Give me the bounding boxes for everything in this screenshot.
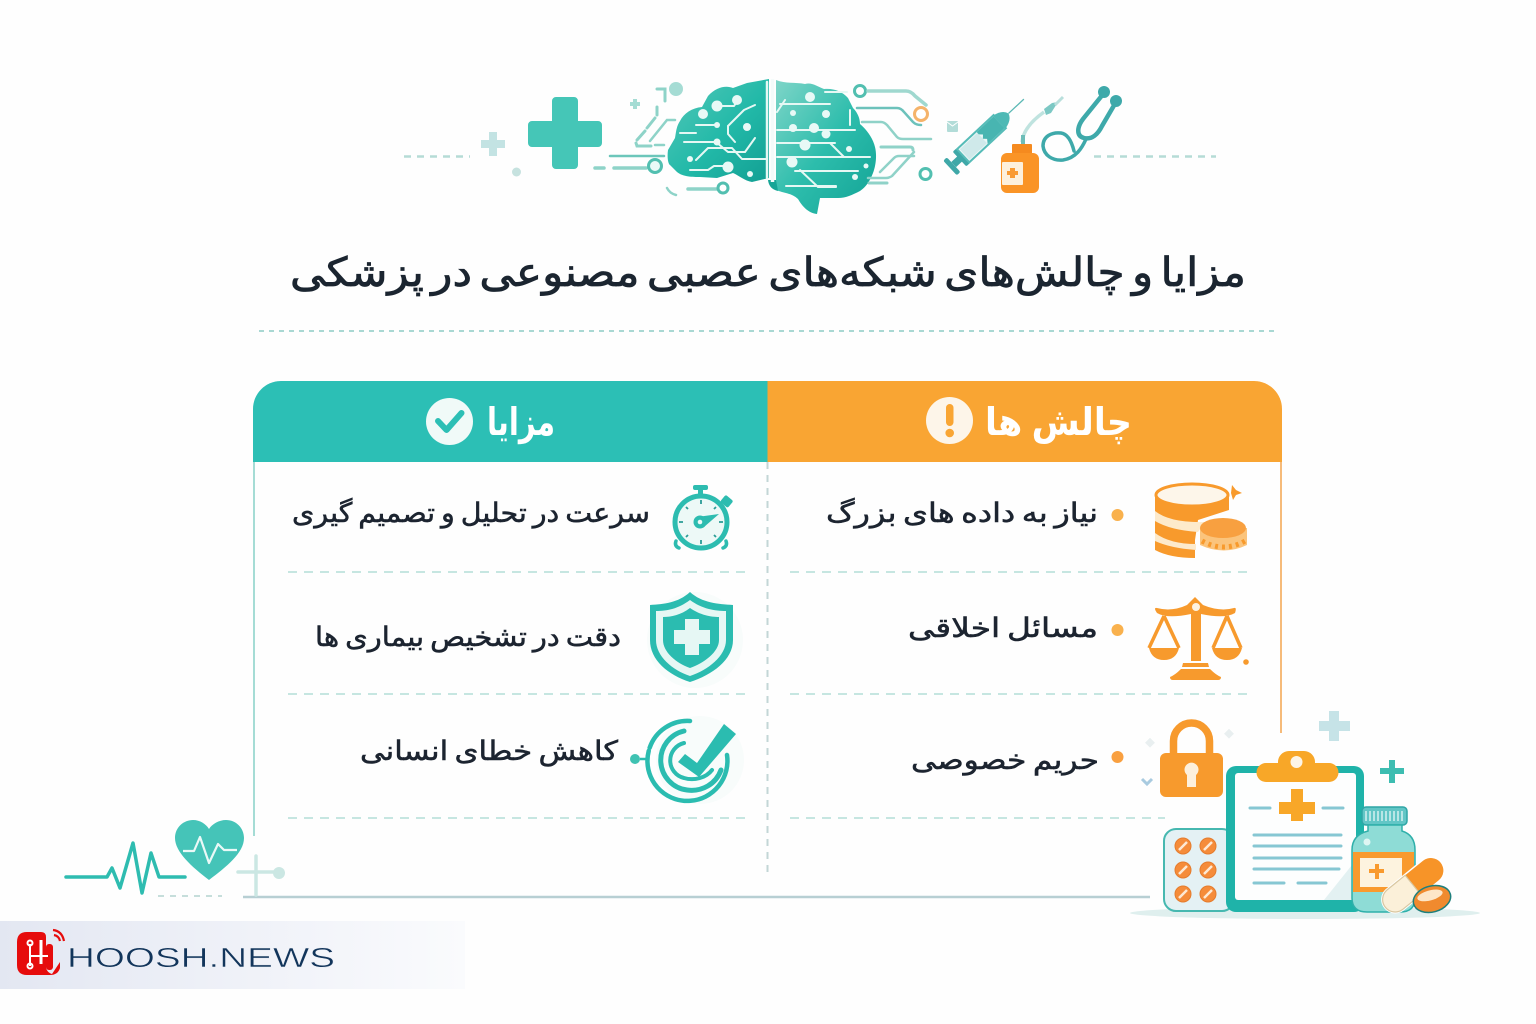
icon: capsule bbox=[1375, 851, 1451, 919]
right dashed ornament bbox=[1094, 155, 1216, 158]
icon: light plus bbox=[1319, 711, 1350, 741]
text: big data: نیاز به داده های بزرگ bbox=[826, 497, 1098, 529]
icon: tiny plus bbox=[630, 99, 640, 109]
icon: chevron bbox=[1142, 779, 1152, 784]
bullet bbox=[1112, 624, 1124, 636]
icon: teal plus bbox=[1380, 760, 1404, 783]
wordmark: HOOSH.NEWS bbox=[67, 942, 335, 973]
left dashed ornament bbox=[404, 155, 470, 158]
title: مزایا و چالش‌های شبکه‌های عصبی مصنوعی در پزشکی bbox=[290, 250, 1246, 296]
icon: warning badge bbox=[926, 397, 973, 444]
panel: comparison table bbox=[243, 381, 1282, 897]
icon: target with check bbox=[630, 716, 744, 804]
panel header: advantages bbox=[253, 381, 768, 462]
icon: small envelope bbox=[947, 121, 958, 132]
icon: blister pack bbox=[1164, 829, 1234, 911]
icon: syringe bbox=[943, 92, 1031, 175]
title divider bbox=[259, 330, 1276, 332]
text: accuracy: دقت در تشخیص بیماری ها bbox=[315, 622, 621, 653]
icon: heartbeat bbox=[66, 820, 285, 896]
bullet bbox=[1112, 509, 1124, 521]
icon: balance scale bbox=[1149, 597, 1249, 680]
heading: advantages: مزایا bbox=[487, 400, 555, 444]
icon: small plus bbox=[481, 132, 505, 156]
icon: pill bottle bbox=[1352, 807, 1415, 912]
text: privacy: حریم خصوصی bbox=[911, 745, 1099, 776]
sparkles bbox=[1145, 729, 1234, 748]
heading: challenges: چالش ها bbox=[985, 400, 1132, 444]
icon: medicine bottle bbox=[1001, 97, 1063, 193]
ground shadow bbox=[1130, 907, 1480, 919]
header illustration bbox=[404, 79, 1216, 214]
icon: database bbox=[1155, 484, 1247, 558]
icon: stethoscope bbox=[1043, 86, 1122, 160]
icon: stopwatch bbox=[675, 485, 733, 548]
icon: padlock bbox=[1160, 723, 1223, 797]
text: ethics: مسائل اخلاقی bbox=[908, 613, 1098, 644]
right circuit lines bbox=[854, 86, 931, 183]
icon: small pill bbox=[1410, 882, 1454, 916]
text: error reduction: کاهش خطای انسانی bbox=[360, 736, 618, 767]
brain midline gap bbox=[771, 79, 774, 182]
table borders bbox=[253, 462, 255, 836]
logo mark bbox=[17, 930, 64, 975]
icon: check badge bbox=[426, 398, 473, 445]
text: speed: سرعت در تحلیل و تصمیم گیری bbox=[292, 497, 650, 529]
left circuit lines bbox=[595, 89, 728, 195]
icon: left node bbox=[669, 82, 683, 96]
panel header: challenges bbox=[768, 381, 1282, 462]
icon: dot bbox=[512, 168, 521, 176]
brain bbox=[668, 79, 876, 214]
icon: orange ring node bbox=[914, 108, 928, 120]
illustration: medical supplies bbox=[1130, 711, 1480, 919]
brain circuit traces bbox=[680, 82, 870, 187]
logo band bbox=[0, 921, 465, 989]
icon: shield bbox=[647, 592, 743, 688]
brain nodes bbox=[687, 92, 868, 180]
row dividers bbox=[288, 572, 1251, 818]
icon: clipboard bbox=[1226, 751, 1364, 912]
icon: medical cross bbox=[528, 97, 602, 169]
bullet bbox=[1112, 751, 1124, 763]
